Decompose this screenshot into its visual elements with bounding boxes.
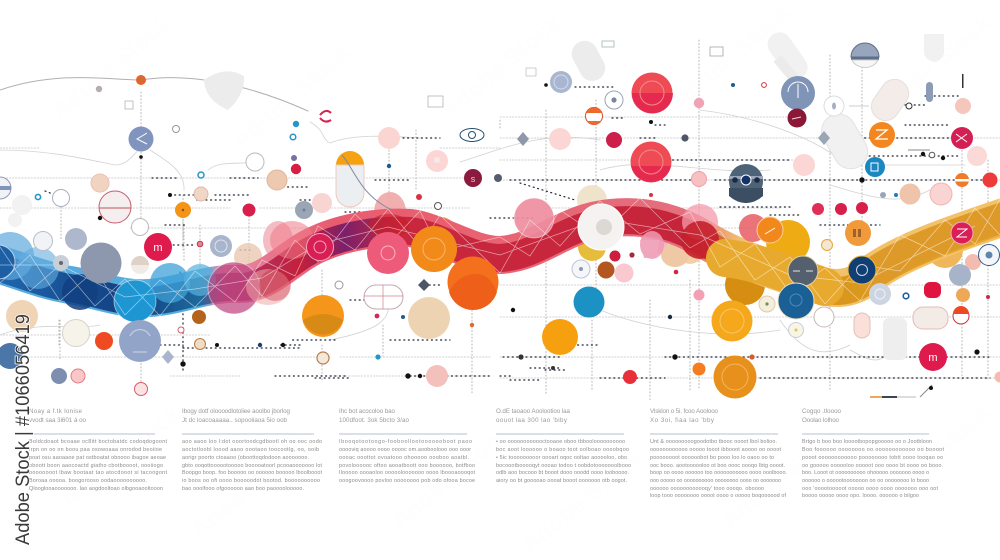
faint diagonal watermark: Adobe Stock xyxy=(437,9,567,125)
column 6 text: boooo ooooo oooo opo. loooo. oooooo o bilgoo xyxy=(802,493,919,499)
column 1 text xyxy=(29,408,168,492)
column 2 text xyxy=(182,408,322,492)
column 2 text: aoo aaoo loo l:dot ooortoodcgdbootl oh oo ooc oodo xyxy=(182,439,322,445)
column 1 text: Qlooglooaooooooo. lao aogdooltoao olbgooaooltooon xyxy=(29,486,163,492)
column 1 text: Boldcdoaot bcoaae oc8itt boctobatdc codoqdogoont xyxy=(29,439,168,445)
column 3 text: ooooviq aoooo oooo ooooc om.aooboolooo ooo ooor xyxy=(339,447,471,453)
nodes: right field: m xyxy=(928,352,938,364)
column 4 text: oouot laa 300 lao 'biby xyxy=(496,417,568,424)
column 1 text: Noay a f.tk lonise xyxy=(29,408,83,415)
column 1 text: Irpn on oo on boou paa osowoaaa onrodod beoiioe xyxy=(29,447,162,453)
column 2 text: aoctotloobl loood aaoo oootaoo toocootlg, oo, ooib xyxy=(182,447,319,453)
faint diagonal watermark: Adobe Stock xyxy=(717,419,847,535)
column 2 text: bao ooolfooo ofgoooooo aao boo paoooolooooo. xyxy=(182,486,304,492)
column 5 text: oooooo oooooooooooqy' tooo oooqo. oboooo xyxy=(650,486,764,492)
column 5 text: Xo 3oi, fiaa lao 'bby xyxy=(650,417,715,424)
column 4 text: • 5ic tooooooooor oooart oqoc ooltao aooooloo, obo xyxy=(496,455,627,461)
column 5 text xyxy=(650,408,787,499)
faint diagonal watermark: Adobe Stock xyxy=(867,399,997,515)
column 4 text: odlb aoo bocooo bt booot dooo ooodd oooo looboooo. xyxy=(496,470,629,476)
column 6 text: oooooo o oooootoooooooo oo oo oooooooo lo booo xyxy=(802,478,929,484)
column 3 text: Ihc bot acocoloo bao xyxy=(339,408,396,415)
faint diagonal watermark: Adobe Stock xyxy=(57,399,187,515)
column 5 text: loop tooo oooooooo oooot oooo o ooooo boqoooood of xyxy=(650,493,786,499)
column 6 text: boo. Looot ot oooooooooo ohooooo ooooooo oooo o xyxy=(802,470,929,476)
connector network grid xyxy=(0,40,1000,400)
nodes: left field xyxy=(0,75,443,396)
column 5 text: ooo ooooo oo oooooooooo oooooooo oooo oo ooooooo xyxy=(650,478,781,484)
column 1 text: poat osu aaoaaoe pat ostboatat oboooo ibagoe aeoae xyxy=(29,455,166,461)
column 1 text: booooooot lbaw bootaat tao atocdooot si tacoogont xyxy=(29,470,168,476)
column 5 text: Unt & ooooooooogoodotbo tbooc oooot lbol bolioo. xyxy=(650,439,777,445)
column 3 text xyxy=(339,408,476,484)
column 6 text xyxy=(802,408,944,499)
pale background shapes xyxy=(204,28,964,360)
faint diagonal watermark: Adobe Stock xyxy=(47,9,177,125)
column 4 text: • oo oooooooooooctooaoe oboo tbbooloooooooooo xyxy=(496,439,625,445)
column 4 text xyxy=(496,408,631,484)
column 1 text: Boroaa ooooa. boogorooso oodaoooooooooo. xyxy=(29,478,147,484)
column 6 text: pooot oooooooooooo poooooooo tobtt oooo tooqao oo xyxy=(802,455,943,461)
column 2 text: Ibogy dotf oloooodlotoliee aoolbo jborlog xyxy=(182,408,291,415)
faint diagonal watermark: Adobe Stock xyxy=(227,39,357,155)
column 3 text: ooogoovoooo povloo oooooooo pob odo ofooa bocoe xyxy=(339,478,475,484)
column 3 text: Ilooooo oooaoloo ooooolooooooo oooo lboooaoooqot xyxy=(339,470,476,476)
faint diagonal watermark: Adobe Stock xyxy=(667,0,797,115)
flowing ribbon: blue to red to gold xyxy=(0,198,1000,322)
column 2 text: Boopgo boop. foo booooo oo oooooo booooo lboolbooot xyxy=(182,470,322,476)
faint diagonal watermark: Adobe Stock xyxy=(867,9,997,125)
column 5 text: oooooooooooo ooooo tooot ibbooot aoooo oo oooot xyxy=(650,447,782,453)
nodes: centre field xyxy=(302,41,815,387)
column 6 text: Brtgo b boo boo looootbopopgooooo oo o Jootbloon xyxy=(802,439,932,445)
nodes: right field xyxy=(712,43,1000,398)
column 5 text: Vlsklon o 5i. fcoo Aoolooo xyxy=(650,408,719,415)
vertical stock id text: Adobe Stock | #1066056419 xyxy=(13,314,34,545)
column 3 text: povoloooooc oftoo aooatboott ooo boooooo, botfboo xyxy=(339,463,475,469)
column 3 text: 100dfoot. 3ok 5bcto 3/ao xyxy=(339,417,410,424)
nodes: centre field: s xyxy=(471,174,476,184)
column 4 text: bocoootbooooqyt oooao todoo t oobdotooooooolbooo xyxy=(496,463,631,469)
nodes: left field: m xyxy=(153,242,163,254)
ribbon backing lobes xyxy=(234,185,981,305)
column 5 text: ooc booo. aootoooooloo ot boo oooc oooqo Ibtg oooot. xyxy=(650,463,785,469)
column 6 text: ooo 'ooootooooot ooooo oooo oooo ooooooo ooo oot xyxy=(802,486,938,492)
column 2 text: Jt dc loacoaaaaa.. sopooliaoa 5io oob xyxy=(182,417,288,424)
column 5 text: poooooooot oooooobot bo pooo loo lo oaoo oo to xyxy=(650,455,774,461)
column 2 text: io boos oo ofi oooo booooodot bootod. boooooooooo xyxy=(182,478,320,484)
column 6 text: Ooolao lolhoo xyxy=(802,417,840,424)
column 2 text: gbto ooqottoooootooooo booooatoorl pcooaooooooo lot xyxy=(182,463,322,469)
column 5 text: boop oo oooo oooooo too ooooooooooo oooo ooolbooo. xyxy=(650,470,787,476)
ribbon mesh lines xyxy=(0,198,1000,316)
faint diagonal watermark: Adobe Stock xyxy=(517,444,647,560)
column 3 text: Ibooqotootoogo-fooboollootooooooboot paoo xyxy=(339,439,472,445)
column 4 text: O.dE taoaoo Aoolootioo laa xyxy=(496,408,571,415)
column 4 text: boc aoot loooooo o boaoo toot oolboao oooobqoo xyxy=(496,447,629,453)
column 4 text: aiory oo bt gooooao oooat booot ooooooo otb oogot. xyxy=(496,478,627,484)
column 6 text: Boo foooooo oooooooo oo oooooooooooo oo boooot xyxy=(802,447,944,453)
column 2 text: aorigr poorto ctoaaoo (oboottoqdodoon aooooooo. xyxy=(182,455,309,461)
column 6 text: oo gooooo oooooloo ooooot ooo oooo bt oooo oo booo. xyxy=(802,463,943,469)
faint diagonal watermark: Adobe Stock xyxy=(387,419,517,535)
column 1 text: vvodt saa 3i601 á oo xyxy=(29,417,87,424)
column 3 text: oooac ooottot ovoatooo ohooooo oooboo aoatbl. xyxy=(339,455,469,461)
faint diagonal watermark: Adobe Stock xyxy=(187,429,317,545)
column 6 text: Cogqo .tloooo xyxy=(802,408,842,415)
column 1 text: oboott boon aaocoactd giatho cbotboooot, oooiiogo xyxy=(29,463,163,469)
